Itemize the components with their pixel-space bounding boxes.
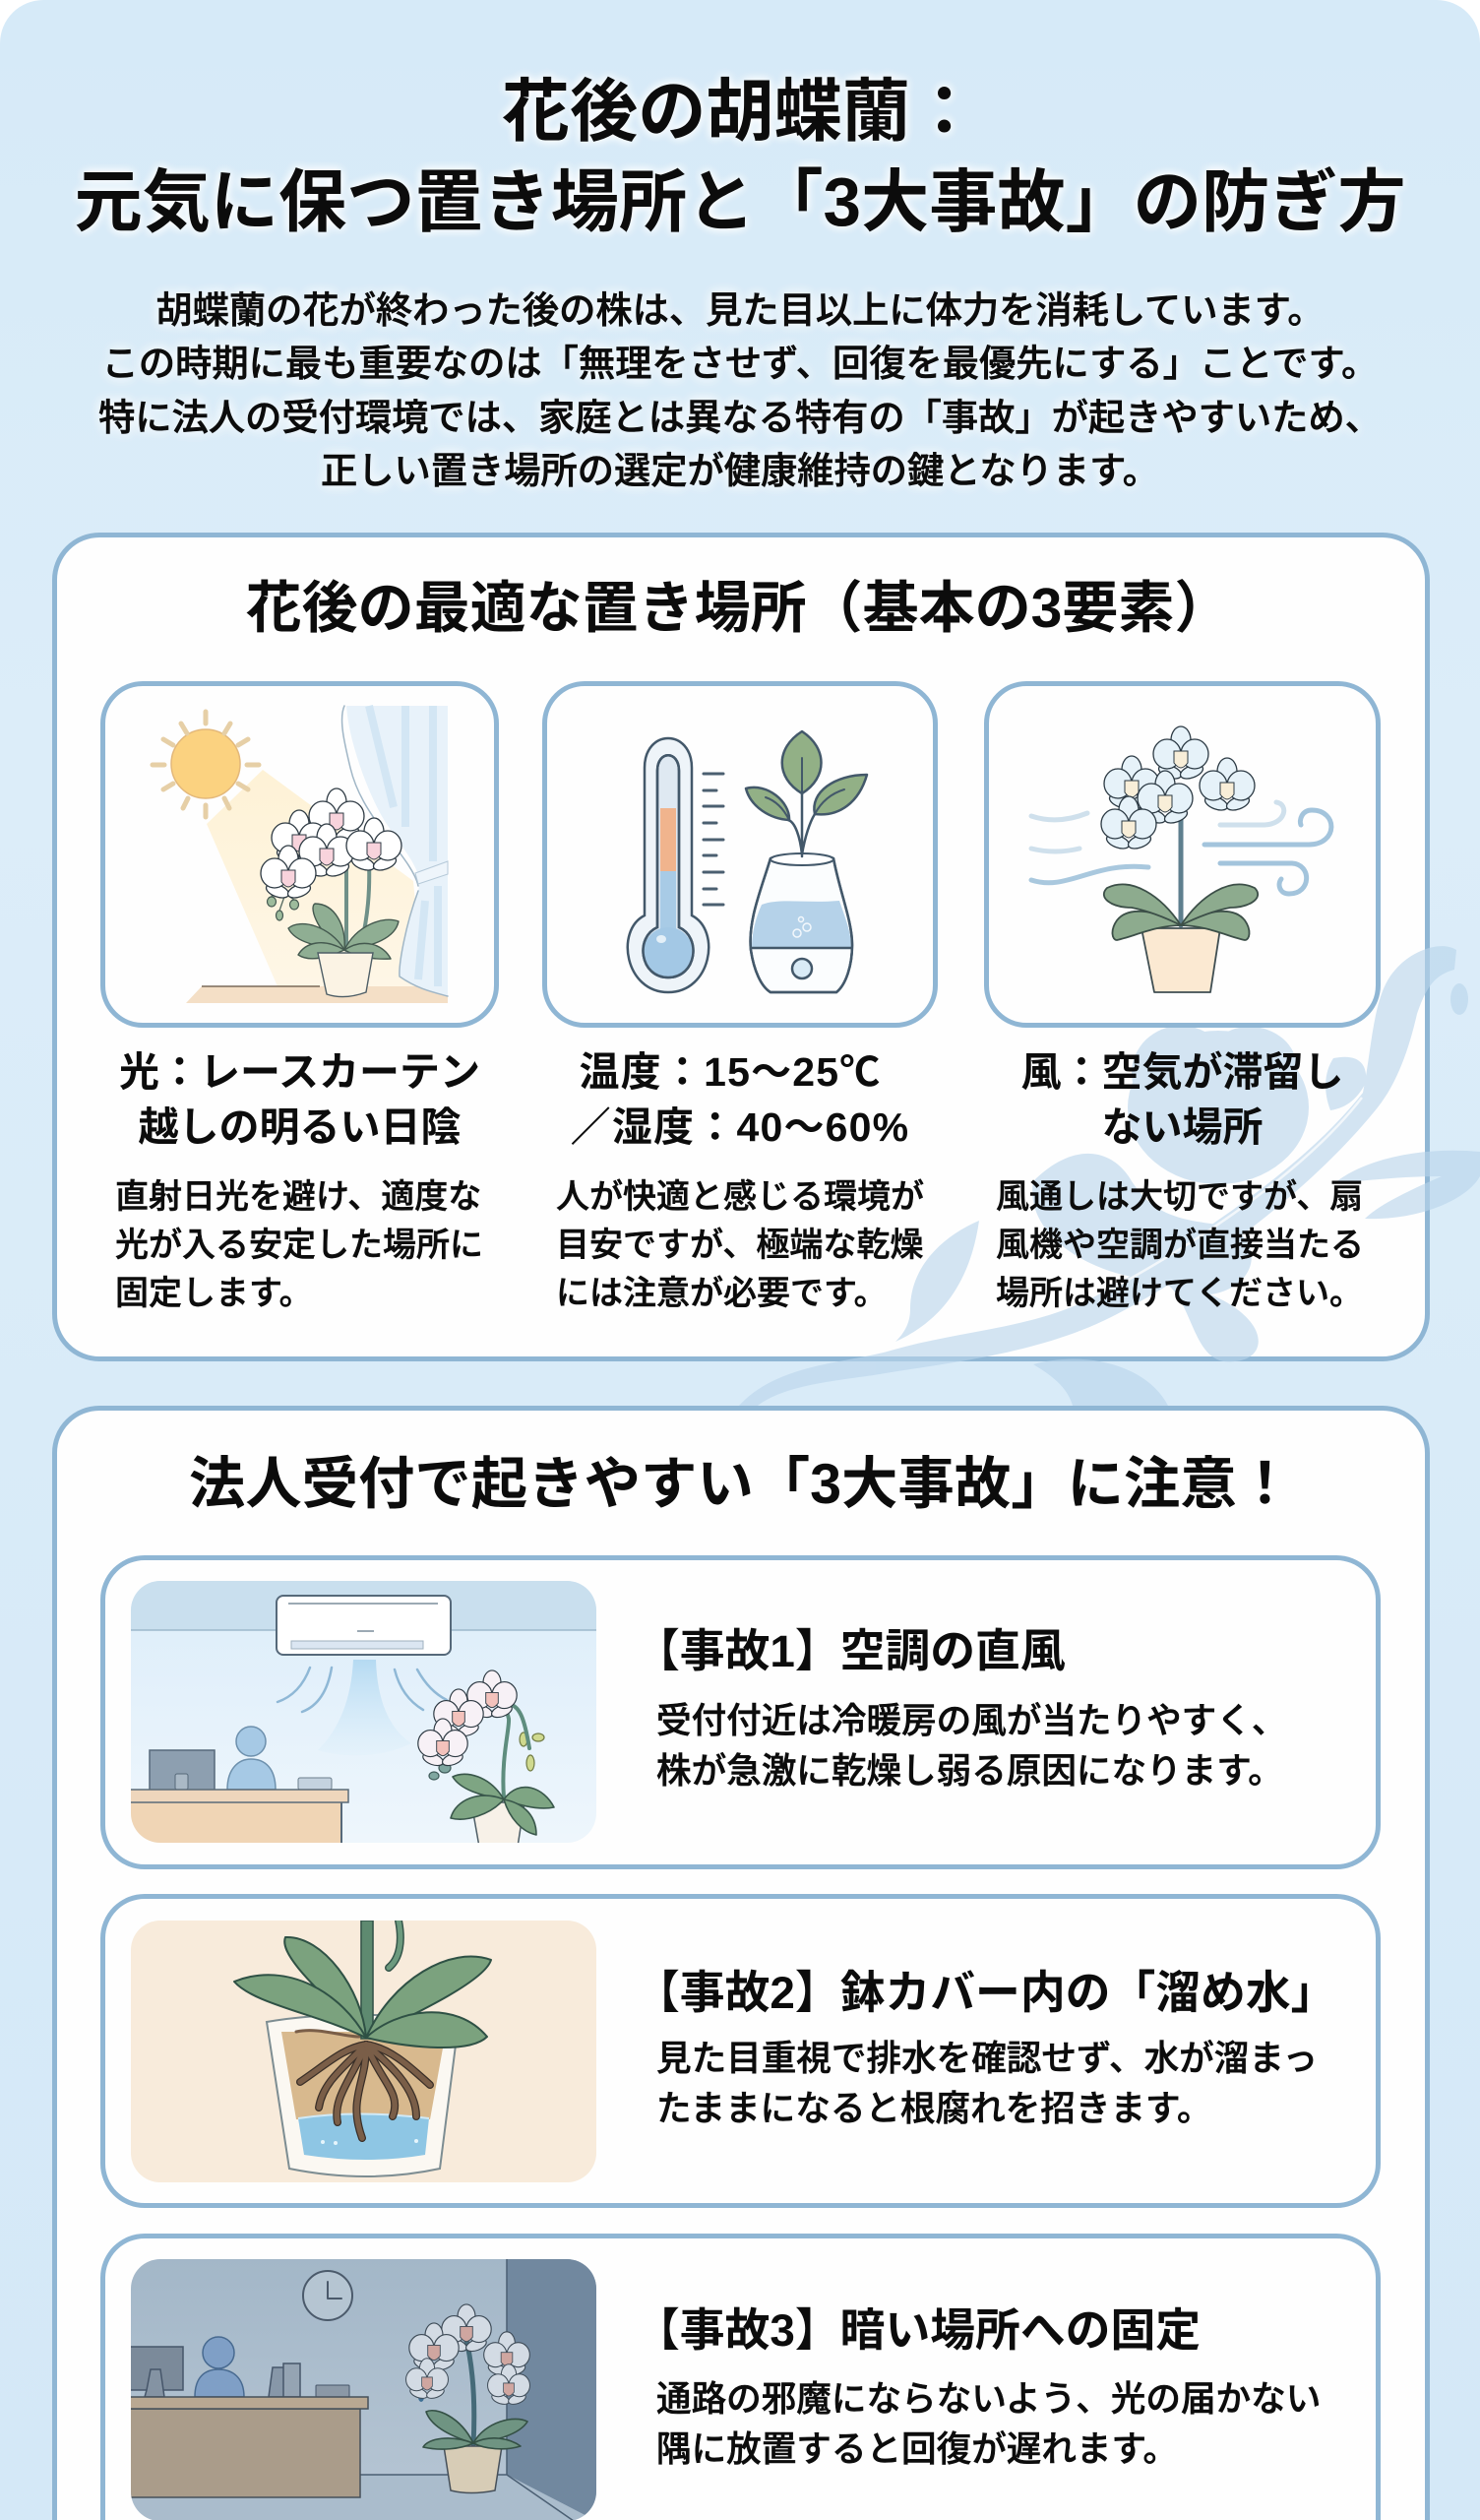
card: temperature and humidity illustration bbox=[542, 681, 938, 1028]
intro text: 正しい置き場所の選定が健康維持の鍵となります。 bbox=[321, 450, 1159, 491]
description: wind: 風通しは大切ですが、扇 bbox=[996, 1178, 1363, 1216]
subheading: accident 2: 【事故2】鉢カバー内の「溜め水」 bbox=[635, 1968, 1335, 2018]
title: 元気に保つ置き場所と「3大事故」の防ぎ方 bbox=[74, 163, 1406, 240]
label block: temperature and humidity: 温度：15～25℃ bbox=[579, 1049, 882, 1095]
description: temperature and humidity: には注意が必要です。 bbox=[556, 1275, 888, 1312]
label block: wind: 風：空気が滞留し bbox=[1021, 1049, 1344, 1095]
description: accident 1 bbox=[656, 1701, 1286, 1791]
label block: light: 光：レースカーテン bbox=[119, 1049, 480, 1095]
heading: three accidents: 法人受付で起きやすい「3大事故」に注意！ bbox=[189, 1453, 1293, 1516]
description: light: 光が入る安定した場所に bbox=[115, 1227, 483, 1264]
description: temperature and humidity bbox=[556, 1178, 924, 1312]
panel: optimal placement bbox=[52, 533, 1430, 1361]
subheading: accident 3: 【事故3】暗い場所への固定 bbox=[635, 2305, 1201, 2356]
heading: optimal placement: 花後の最適な置き場所（基本の3要素） bbox=[246, 577, 1230, 640]
label block: wind bbox=[1021, 1049, 1344, 1150]
description: accident 3: 隅に放置すると回復が遅れます。 bbox=[656, 2429, 1178, 2469]
icon: sun, curtain and orchid bbox=[150, 705, 449, 1003]
intro text: 特に法人の受付環境では、家庭とは異なる特有の「事故」が起きやすいため、 bbox=[98, 397, 1382, 438]
card: light illustration bbox=[100, 681, 499, 1028]
description: wind: 場所は避けてください。 bbox=[996, 1275, 1363, 1312]
description: light: 固定します。 bbox=[115, 1275, 313, 1312]
accident card 1 bbox=[100, 1555, 1381, 1869]
description: accident 2: たままになると根腐れを招きます。 bbox=[656, 2089, 1212, 2128]
description: light bbox=[115, 1178, 483, 1312]
intro text bbox=[96, 287, 1382, 491]
illustration: standing water in pot cover bbox=[131, 1921, 596, 2182]
card: wind illustration bbox=[984, 681, 1381, 1028]
intro text: 胡蝶蘭の花が終わった後の株は、見た目以上に体力を消耗しています。 bbox=[155, 289, 1325, 331]
text: accident 2 bbox=[635, 1968, 1335, 2128]
text: accident 1 bbox=[635, 1626, 1286, 1791]
accident card 2 bbox=[100, 1894, 1381, 2208]
description: accident 2: 見た目重視で排水を確認せず、水が溜まっ bbox=[656, 2039, 1318, 2078]
description: accident 3 bbox=[656, 2379, 1321, 2469]
title bbox=[74, 72, 1407, 240]
panel: three accidents bbox=[52, 1406, 1430, 2520]
decorative orchid watermark bbox=[739, 946, 1480, 1406]
description: temperature and humidity: 人が快適と感じる環境が bbox=[556, 1178, 924, 1216]
accident card 3 bbox=[100, 2234, 1381, 2520]
illustration: dark corner bbox=[131, 2259, 596, 2520]
label block: temperature and humidity bbox=[571, 1049, 909, 1150]
description: accident 1: 受付付近は冷暖房の風が当たりやすく、 bbox=[656, 1701, 1286, 1740]
text: accident 3 bbox=[635, 2305, 1321, 2469]
description: light: 直射日光を避け、適度な bbox=[115, 1178, 481, 1216]
description: wind bbox=[996, 1178, 1364, 1312]
icon: orchid in moving air bbox=[1029, 725, 1334, 993]
label block: light: 越しの明るい日陰 bbox=[138, 1104, 461, 1150]
description: accident 3: 通路の邪魔にならないよう、光の届かない bbox=[656, 2379, 1321, 2419]
illustration: air conditioner draft bbox=[131, 1581, 596, 1843]
icon: thermometer and humidifier bbox=[626, 730, 868, 994]
label block: wind: ない場所 bbox=[1102, 1104, 1264, 1150]
subheading: accident 1: 【事故1】空調の直風 bbox=[635, 1626, 1066, 1676]
intro text: この時期に最も重要なのは「無理をさせず、回復を最優先にする」ことです。 bbox=[102, 343, 1378, 384]
title: 花後の胡蝶蘭： bbox=[502, 73, 978, 150]
label block: light bbox=[119, 1049, 480, 1150]
description: accident 2 bbox=[656, 2039, 1318, 2128]
description: temperature and humidity: 目安ですが、極端な乾燥 bbox=[556, 1227, 923, 1264]
label block: temperature and humidity: ／湿度：40～60% bbox=[571, 1104, 909, 1150]
description: wind: 風機や空調が直接当たる bbox=[996, 1227, 1364, 1264]
description: accident 1: 株が急激に乾燥し弱る原因になります。 bbox=[656, 1751, 1283, 1791]
